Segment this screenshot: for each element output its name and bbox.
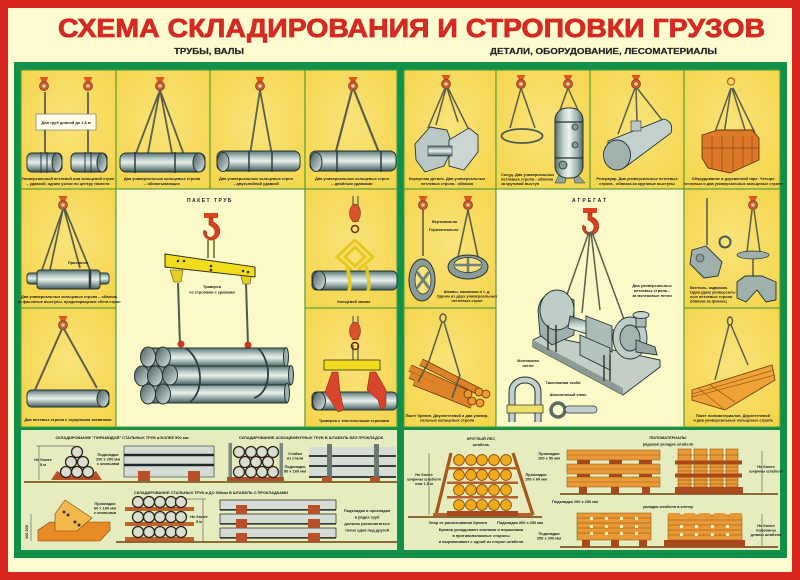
cage stack end: Не более	[757, 523, 775, 528]
pump base	[533, 335, 660, 395]
heading: sawn timber: рядовая укладка штабеля	[643, 442, 693, 446]
storage note: в рядах труб	[355, 514, 380, 520]
shackle	[507, 380, 543, 422]
panel: pipes and shafts	[17, 70, 397, 427]
bundle of pipes	[134, 347, 294, 404]
spaced stack end view: Не более	[190, 514, 208, 519]
sling: log bundle: сальных кольцевых стропа	[420, 418, 475, 422]
heading: sawn timber: ПИЛОМАТЕРИАЛЫ	[650, 435, 686, 440]
sling: valves	[690, 196, 776, 304]
pyramid stack side view	[124, 446, 214, 481]
wedge support detail: с клиньями	[94, 510, 117, 515]
sling: casing part	[409, 75, 486, 186]
sling: pipe clamps	[312, 196, 397, 304]
round timber stack: Подкладка 200 x 250 мм	[497, 520, 543, 525]
cage stack side: 250 x 200 мм	[537, 536, 561, 540]
sling: shaft with tack	[17, 196, 121, 304]
cell backgrounds	[21, 70, 397, 427]
sling: textile straps: Траверса с текстильными стропами	[319, 418, 390, 423]
pyramid stack end view: с клиньями	[97, 461, 120, 466]
spreader label: Траверса	[203, 284, 221, 289]
storage heading: spaced stack: СКЛАДИРОВАНИЕ СТАЛЬНЫХ ТРУБ ⌀ ДО 500мм В ШТАБЕЛЬ С ПРОКЛАДКАМИ	[134, 490, 288, 495]
heading: unit: АГРЕГАТ	[572, 198, 608, 204]
sling: casing part: петлевых стропа - обвязка	[421, 181, 474, 186]
cage stack end	[664, 513, 781, 547]
asbestos stack end view	[227, 443, 306, 481]
sling: lumber pack: Пакет пиломатериалов. Двухпетлевой	[696, 413, 770, 418]
sling: shaft with tack: за фасонные выступы, предотвращение сбега строп	[17, 299, 121, 304]
pyramid stack end view: 5 м	[40, 462, 46, 467]
sling: valves: обвязка за фланец	[690, 298, 727, 304]
sling: pulleys: петлевых строп	[451, 298, 483, 303]
panel: parts and equipment	[404, 70, 783, 427]
round timber stack: в противоположные стороны	[452, 533, 510, 538]
sling: pulleys: Вертикально	[432, 219, 458, 224]
pyramid stack end view	[34, 446, 120, 480]
subheading: pipes: ТРУБЫ, ВАЛЫ	[174, 47, 244, 56]
chart: lifted pump unit: петлевых стропа –	[634, 288, 671, 293]
big hook	[582, 208, 599, 235]
sling: double choke: – двойным удавками	[332, 181, 373, 186]
sling: two ring slings: – обхватывающие	[144, 181, 181, 186]
cage stack end: половины	[756, 528, 777, 532]
chart: pipe bundle on spreader	[134, 198, 294, 404]
sling: pipe clamps: Клещевой захват	[337, 299, 371, 304]
pyramid stack end view: 100 x 200 мм	[96, 456, 120, 462]
round timber stack: Бревна укладывают комлями и вершинами	[439, 527, 523, 532]
sling: pulleys: Одним из двух универсальных	[437, 294, 498, 298]
sling: tank	[596, 75, 678, 186]
chart: lifted pump unit	[507, 198, 672, 422]
sling: valves: ных петлевых стропа	[690, 294, 733, 299]
sling: short pipes	[22, 77, 115, 186]
sling: two ring slings: Два универсальных кольцевых стропа	[124, 176, 200, 181]
sling: choke hitch: Два универсальных кольцевых строп	[219, 176, 293, 181]
cage stack end: длины штабеля	[751, 532, 781, 537]
spaced stack side view	[220, 500, 336, 542]
cage stack side: Подкладки	[538, 531, 560, 536]
round timber stack: Не более	[415, 472, 433, 477]
big hook	[203, 213, 220, 240]
subheading: parts: ДЕТАЛИ, ОБОРУДОВАНИЕ, ЛЕСОМАТЕРИАЛЫ	[490, 47, 717, 56]
heading: round timber: штабель	[473, 442, 490, 447]
round timber stack: и выравнивают с одной из сторон штабеля	[439, 539, 523, 544]
spreader beam	[165, 254, 255, 284]
chart: lifted pump unit: петля	[522, 363, 534, 368]
row stack end	[675, 449, 783, 494]
wrench	[551, 403, 597, 417]
round timber stack: или 1,5 м	[415, 481, 433, 486]
shaft and coupling	[568, 316, 614, 370]
round timber stack: Упор от раскатывания бревен	[429, 520, 488, 525]
heading: pipe bundle: ПАКЕТ ТРУБ	[187, 198, 233, 204]
pyramid stack end view: Подкладки	[97, 452, 119, 457]
row stack side: Прокладки	[538, 451, 560, 456]
chart: lifted pump unit: Два универсальных	[632, 283, 672, 288]
cage stack side	[537, 513, 651, 547]
spreader label: со стропами с крюками	[189, 290, 235, 294]
chart: lifted pump unit: за монтажные петли	[632, 293, 672, 298]
spaced stack end view: 5 м	[196, 519, 202, 524]
wedge support detail: 100 200	[24, 525, 29, 539]
sling: vessel: за круговой выступ	[501, 181, 540, 186]
round timber stack: 100 x 60 мм	[525, 476, 547, 482]
row stack side: Подкладка 200 x 250 мм	[552, 499, 598, 504]
cell backgrounds	[404, 70, 780, 427]
sling: two ring slings	[120, 77, 205, 186]
motor	[538, 290, 574, 345]
sling: crate: Оборудование в деревянной таре. Четыре	[692, 176, 774, 181]
panel: timber storage	[404, 430, 783, 550]
round timber stack: ширины штабеля	[407, 476, 441, 482]
spaced stack end view	[125, 496, 209, 542]
asbestos stack side view	[309, 444, 396, 482]
chart: lifted pump unit: Шплинтовый ключ	[550, 392, 586, 397]
sling: pulleys: Горизонтально	[429, 227, 459, 232]
sling: sliding choke	[24, 316, 112, 422]
heading: cage stack: укладка штабеля в клетку	[643, 504, 694, 509]
row stack end: Не более	[757, 464, 775, 469]
chart: lifted pump unit: Такелажная скоба	[546, 380, 581, 385]
sling: valves: Вентиль, задвижка.	[690, 285, 728, 290]
sling: vessel: петлевых стропа - обвязка	[501, 176, 554, 182]
asbestos stack end view: Стойки	[288, 451, 302, 456]
sling: pulleys: Шкивы, маховики и т. д.	[444, 289, 490, 294]
sling: tank: Резервуар. Два универсальных петлевых	[596, 176, 678, 181]
panel: steel pipe storage	[21, 430, 397, 550]
sling: shaft with tack: Прихватка	[68, 260, 89, 265]
row stack side	[538, 450, 660, 504]
sling: double choke	[310, 77, 396, 186]
sling: choke hitch	[217, 77, 300, 186]
sling: short pipes: Универсальный петлевой или кольцевой строп	[22, 176, 114, 181]
pump housing	[613, 312, 657, 359]
title: СХЕМА СКЛАДИРОВАНИЯ И СТРОПОВКИ ГРУЗОВ	[58, 13, 765, 43]
sling: vessel	[501, 75, 585, 186]
wedge support detail: Прокладки	[94, 501, 116, 506]
sling: tank: стропа - обвязка за круговые выступы	[599, 181, 675, 186]
row stack side: 100 x 50 мм	[538, 456, 560, 460]
sling: shaft with tack: Два универсальных кольцевых стропа – обвязка	[21, 294, 117, 299]
pyramid stack end view: Не более	[34, 457, 52, 462]
sling: log bundle: Пакет бревен. Двухпетлевой и два универ-	[405, 413, 489, 418]
row stack end: ширины штабеля	[749, 468, 783, 474]
sling: choke hitch: – двухслойной удавкой	[233, 181, 279, 186]
chart: lifted pump unit: Монтажная	[517, 358, 539, 363]
sling: short pipes: – удавкой, одним узлом по центру тяжести	[26, 181, 110, 186]
sling: casing part: Корпусная деталь. Два универсальных	[409, 176, 485, 181]
sling: log bundle	[405, 314, 490, 422]
storage note: точно одна под другой	[345, 528, 390, 532]
sling: pulleys	[409, 196, 498, 303]
sling: sliding choke: Два витевых стропа с торцевыми захватами	[24, 417, 112, 422]
sling: lumber pack: и два универсальных кольцевых стропа	[693, 418, 774, 422]
sling: double choke: Два универсальных кольцевых строп	[315, 176, 389, 181]
wedge support detail: 60 x 160 мм	[94, 506, 116, 510]
asbestos stack end view: Подкладки	[284, 464, 306, 469]
asbestos stack end view: из стали	[287, 456, 304, 460]
sling: crate	[683, 78, 783, 186]
storage note: Подкладки и прокладки	[344, 508, 390, 513]
sling: lumber pack	[692, 317, 775, 422]
round timber stack	[407, 453, 547, 544]
sling: vessel: Сосуд. Два универсальных	[501, 172, 554, 177]
asbestos stack end view: 80 x 160 мм	[284, 468, 306, 474]
wedge support detail	[24, 500, 117, 541]
round timber stack: Прокладки	[526, 472, 546, 477]
heading: round timber: КРУГЛЫЙ ЛЕС	[467, 436, 495, 441]
sling: textile straps	[312, 316, 397, 423]
sling: crate: петлевых и два универсальных кольцевых стропа	[683, 181, 783, 186]
storage heading: asbestos: СКЛАДИРОВАНИЕ АСБОЦЕМЕНТНЫХ ТРУБ В ШТАБЕЛЬ БЕЗ ПРОКЛАДОК	[239, 435, 384, 440]
sling: short pipes: Для труб длиной до 1,8 м	[41, 120, 91, 125]
storage heading: pyramid: СКЛАДИРОВАНИЕ "ПИРАМИДОЙ" СТАЛЬНЫХ ТРУБ ⌀ БОЛЕЕ 500 мм	[56, 435, 189, 440]
sling: valves: Один (два) универсаль-	[690, 290, 737, 294]
storage note: должны располагаться	[344, 521, 390, 526]
